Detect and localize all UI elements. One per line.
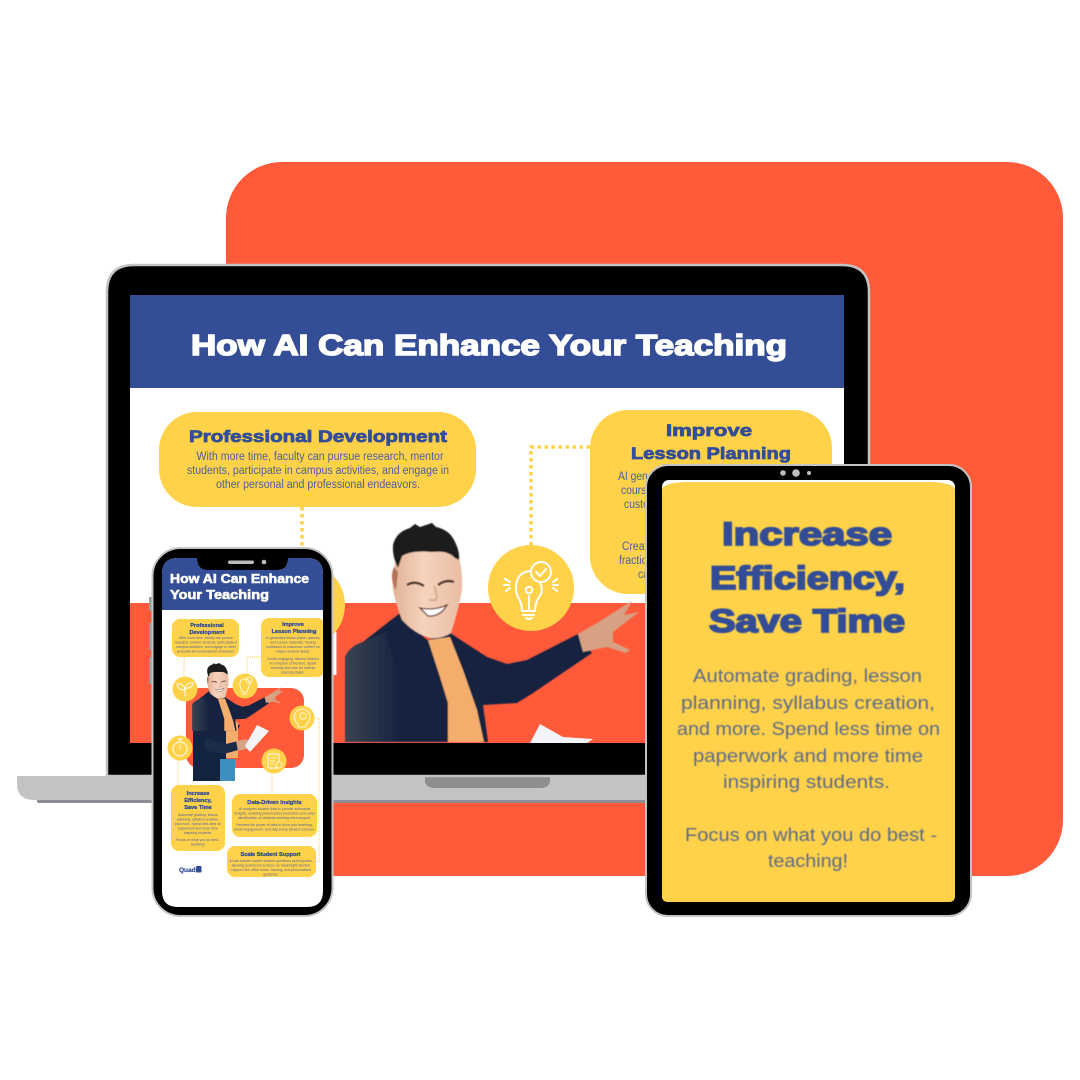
tablet heading: Increase bbox=[722, 516, 892, 552]
phone lesson planning card: and course materials, freeing bbox=[270, 640, 316, 644]
shirt bbox=[428, 637, 484, 742]
phone data-driven insights card: Harness the power of data to drive your teaching, bbox=[236, 823, 313, 827]
man in laptop screen bbox=[345, 523, 639, 742]
tablet body text: paperwork and more time bbox=[693, 745, 923, 766]
lesson planning card: AI generates lesson plans, quizzes, and bbox=[618, 471, 800, 483]
professional development connector bbox=[300, 507, 304, 582]
phone data-driven insights card: AI analyzes student data to provide actionable bbox=[239, 807, 310, 811]
phone scale student support card: Scale Student Support bbox=[241, 852, 301, 858]
tablet heading bbox=[709, 516, 905, 639]
phone lesson planning card: Lesson Planning bbox=[272, 629, 317, 635]
icon: idea bulb bbox=[232, 674, 258, 698]
lesson planning card: care for diverse learning styles. bbox=[638, 569, 780, 581]
phone data-driven insights card: identification of students needing extra support. bbox=[238, 816, 311, 820]
icon: stopwatch bbox=[168, 736, 192, 760]
phone paper bbox=[245, 725, 269, 752]
tablet body text bbox=[677, 665, 940, 871]
professional development card: Professional Development bbox=[189, 427, 447, 446]
phone professional development card: research, mentor students, participate in bbox=[175, 640, 237, 644]
lesson planning card: Lesson Planning bbox=[631, 444, 791, 463]
phone speaker bbox=[228, 560, 254, 564]
tablet heading: Efficiency, bbox=[710, 560, 905, 596]
phone scale student support card bbox=[227, 846, 316, 877]
phone header: Your Teaching bbox=[170, 588, 269, 602]
hand bbox=[578, 601, 639, 653]
phone increase efficiency card: and more. Spend less time on bbox=[175, 822, 221, 826]
phone camera bbox=[262, 560, 266, 564]
phone increase efficiency card: Save Time bbox=[184, 805, 212, 811]
phone scale student support card: AI can handle routine student questions and inquiries, bbox=[229, 859, 313, 863]
phone scale student support card: support, like office hours, tutoring, and personalized bbox=[231, 868, 311, 872]
ear bbox=[392, 567, 398, 590]
hair bbox=[393, 523, 459, 568]
lesson planning card: Create engaging, tailored lessons in a bbox=[622, 541, 797, 553]
tablet bbox=[646, 465, 971, 916]
tablet screen bbox=[662, 480, 955, 902]
lesson planning card: course materials, freeing professors to bbox=[621, 485, 797, 497]
phone professional development card: With more time, faculty can pursue bbox=[179, 636, 233, 640]
phone body bbox=[152, 548, 332, 916]
phone lesson planning card: Create engaging, tailored lessons bbox=[267, 657, 319, 661]
phone connectors bbox=[178, 657, 319, 862]
screen header: How AI Can Enhance Your Teaching bbox=[191, 330, 787, 362]
phone data-driven insights card bbox=[232, 794, 317, 837]
phone increase efficiency card: Focus on what you do best - bbox=[176, 838, 221, 842]
professional development card: With more time, faculty can pursue research, mentor bbox=[196, 451, 444, 463]
paper bbox=[530, 724, 593, 743]
phone header: How AI Can Enhance bbox=[170, 572, 309, 586]
phone data-driven insights card: insights, enabling personalized instruction and early bbox=[234, 812, 315, 816]
laptop bbox=[17, 265, 960, 803]
tablet body text: Focus on what you do best - bbox=[685, 824, 937, 845]
phone lesson planning card: Improve bbox=[282, 622, 304, 628]
phone man lower body bbox=[193, 722, 250, 781]
tablet body bbox=[646, 465, 971, 916]
laptop base bbox=[17, 776, 960, 803]
phone lesson planning card bbox=[261, 618, 325, 677]
phone header bbox=[162, 558, 323, 610]
tablet body text: inspiring students. bbox=[723, 771, 890, 792]
phone red panel bbox=[186, 688, 304, 768]
phone professional development card: Development bbox=[189, 630, 225, 636]
phone professional development card: personal and professional endeavors. bbox=[177, 650, 235, 654]
phone increase efficiency card: planning, syllabus creation, bbox=[177, 818, 219, 822]
professional development card: students, participate in campus activities, and engage in bbox=[187, 465, 449, 477]
tablet yellow card bbox=[662, 482, 955, 902]
phone data-driven insights card: Data-Driven Insights bbox=[247, 800, 302, 806]
phone increase efficiency card bbox=[171, 785, 225, 851]
phone screen bbox=[162, 558, 325, 907]
Quad logo bbox=[179, 866, 202, 874]
tablet body text: Automate grading, lesson bbox=[693, 665, 922, 686]
phone lesson planning card: AI generates lesson plans, quizzes, bbox=[265, 636, 321, 640]
phone notch bbox=[197, 557, 288, 570]
icon: lightbulb bbox=[488, 545, 574, 631]
lesson planning connector bbox=[531, 447, 590, 546]
white strip bbox=[333, 632, 336, 675]
phone increase efficiency card: Efficiency, bbox=[184, 798, 212, 804]
lesson planning card: Improve bbox=[666, 421, 752, 440]
tablet body text: teaching! bbox=[768, 850, 848, 871]
jacket highlight bbox=[345, 632, 402, 742]
side buttons bbox=[149, 597, 152, 684]
phone lesson planning card: in a fraction of the time. Spark bbox=[270, 662, 316, 666]
phone increase efficiency card: Increase bbox=[187, 791, 209, 797]
icon: checklist bbox=[262, 748, 286, 774]
professional development card bbox=[159, 412, 476, 507]
professional development card: other personal and professional endeavors. bbox=[216, 479, 420, 491]
eyes and mouth bbox=[407, 581, 454, 586]
phone professional development card: campus activities, and engage in other bbox=[176, 645, 237, 649]
jacket bbox=[345, 613, 592, 742]
phone increase efficiency card: teaching! bbox=[191, 842, 205, 846]
tablet cameras bbox=[780, 469, 811, 477]
phone increase efficiency card: paperwork and more time bbox=[178, 826, 218, 830]
neck and face bbox=[392, 547, 462, 638]
Quad logo: Quad bbox=[179, 867, 196, 874]
phone professional development card: Professional bbox=[190, 623, 224, 629]
tablet body text: planning, syllabus creation, bbox=[681, 692, 935, 713]
phone lesson planning card: learning styles. bbox=[281, 670, 305, 674]
phone increase efficiency card: inspiring students. bbox=[184, 831, 212, 835]
icon: sprout bbox=[172, 676, 198, 702]
phone lesson planning card: unique student needs. bbox=[276, 650, 310, 654]
phone lesson planning card: curiosity and care for diverse bbox=[271, 666, 315, 670]
phone bbox=[149, 548, 332, 916]
lesson planning card: customize content for unique student bbox=[624, 499, 795, 511]
tablet heading: Save Time bbox=[709, 603, 905, 639]
laptop screen bbox=[130, 295, 844, 743]
phone lesson planning card: professors to customize content for bbox=[266, 645, 321, 649]
red band bbox=[130, 603, 844, 743]
phone scale student support card: guidance. bbox=[263, 872, 279, 876]
phone professional development card bbox=[172, 619, 239, 657]
phone data-driven insights card: boost engagement, and help every student succeed. bbox=[234, 828, 315, 832]
lesson planning card: fraction of the time. Spark curiosity and bbox=[619, 555, 799, 567]
icon: brain bbox=[290, 706, 314, 730]
phone increase efficiency card: Automate grading, lesson bbox=[178, 813, 218, 817]
phone scale student support card: allowing professors to focus on meaningful student bbox=[232, 864, 310, 868]
lesson planning card bbox=[590, 410, 832, 594]
screen header bbox=[130, 295, 844, 388]
tablet body text: and more. Spend less time on bbox=[677, 718, 940, 739]
laptop frame bbox=[107, 265, 869, 776]
phone man upper body bbox=[192, 663, 283, 731]
icon: sprout circle bbox=[259, 562, 345, 648]
orange background panel bbox=[226, 162, 1063, 876]
